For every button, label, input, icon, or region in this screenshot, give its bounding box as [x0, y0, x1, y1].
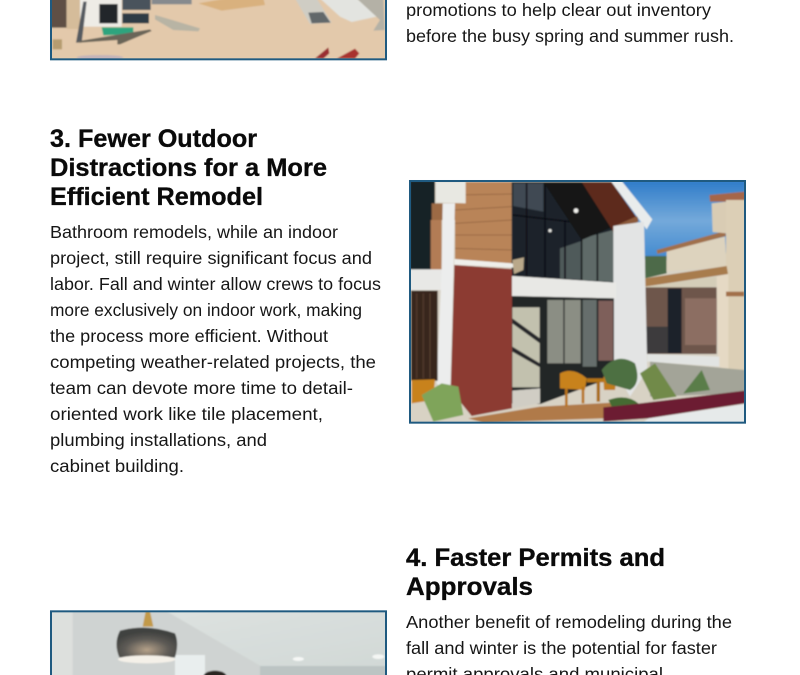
text block: section 3 body: Bathroom remodels, while an indoor — [50, 222, 338, 242]
text block: section 3 body: plumbing installations, and — [50, 430, 267, 450]
photo: kitchen interior with pendant lamp — [51, 611, 386, 675]
photo: modern two-storey house exterior — [410, 181, 745, 423]
text block: end of section 2 — [406, 0, 734, 46]
text block: section 3 body: oriented work like tile placement, — [50, 404, 323, 424]
heading: section 4: 4. Faster Permits and — [406, 544, 665, 572]
text block: end of section 2: promotions to help clear out inventory — [406, 0, 711, 20]
heading: section 4 — [406, 544, 665, 601]
text block: section 3 body: team can devote more time to detail- — [50, 378, 353, 398]
photo: construction materials on a subfloor — [51, 0, 386, 60]
heading: section 3 — [50, 125, 327, 211]
text block: section 3 body: the process more efficient. Without — [50, 326, 328, 346]
heading: section 3: 3. Fewer Outdoor — [50, 125, 257, 153]
text block: section 3 body: more exclusively on indoor work, making — [50, 300, 362, 320]
text block: section 4 body: Another benefit of remodeling during the — [406, 612, 732, 632]
heading: section 3: Efficient Remodel — [50, 183, 263, 211]
text block: section 3 body: cabinet building. — [50, 456, 184, 476]
text block: section 4 body — [406, 612, 732, 675]
text block: section 3 body: project, still require significant focus and — [50, 248, 372, 268]
heading: section 3: Distractions for a More — [50, 154, 327, 182]
text block: section 4 body: fall and winter is the potential for faster — [406, 638, 717, 658]
heading: section 4: Approvals — [406, 573, 533, 601]
text block: section 3 body: competing weather-related projects, the — [50, 352, 376, 372]
text block: section 3 body — [50, 222, 381, 476]
text block: section 3 body: labor. Fall and winter allow crews to focus — [50, 274, 381, 294]
text block: end of section 2: before the busy spring and summer rush. — [406, 26, 734, 46]
